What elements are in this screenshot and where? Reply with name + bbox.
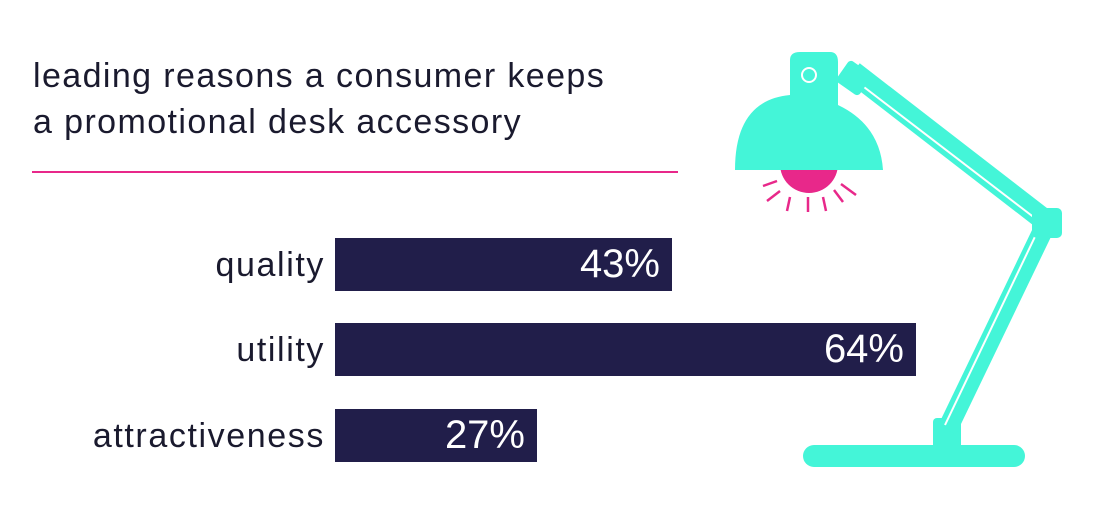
- bar: quality: 43%: [580, 242, 660, 286]
- label: attractiveness: attractiveness: [93, 417, 325, 455]
- bar: utility: [335, 323, 916, 376]
- bar: attractiveness: [335, 409, 537, 462]
- title: a promotional desk accessory: [33, 103, 522, 141]
- bar: utility: 64%: [824, 327, 904, 371]
- title: [33, 57, 605, 141]
- bar: quality: [335, 238, 672, 291]
- pink divider: [32, 171, 678, 173]
- bar: attractiveness: 27%: [445, 413, 525, 457]
- label: utility: utility: [236, 331, 325, 369]
- title: leading reasons a consumer keeps: [33, 57, 605, 95]
- label: quality: quality: [216, 246, 325, 284]
